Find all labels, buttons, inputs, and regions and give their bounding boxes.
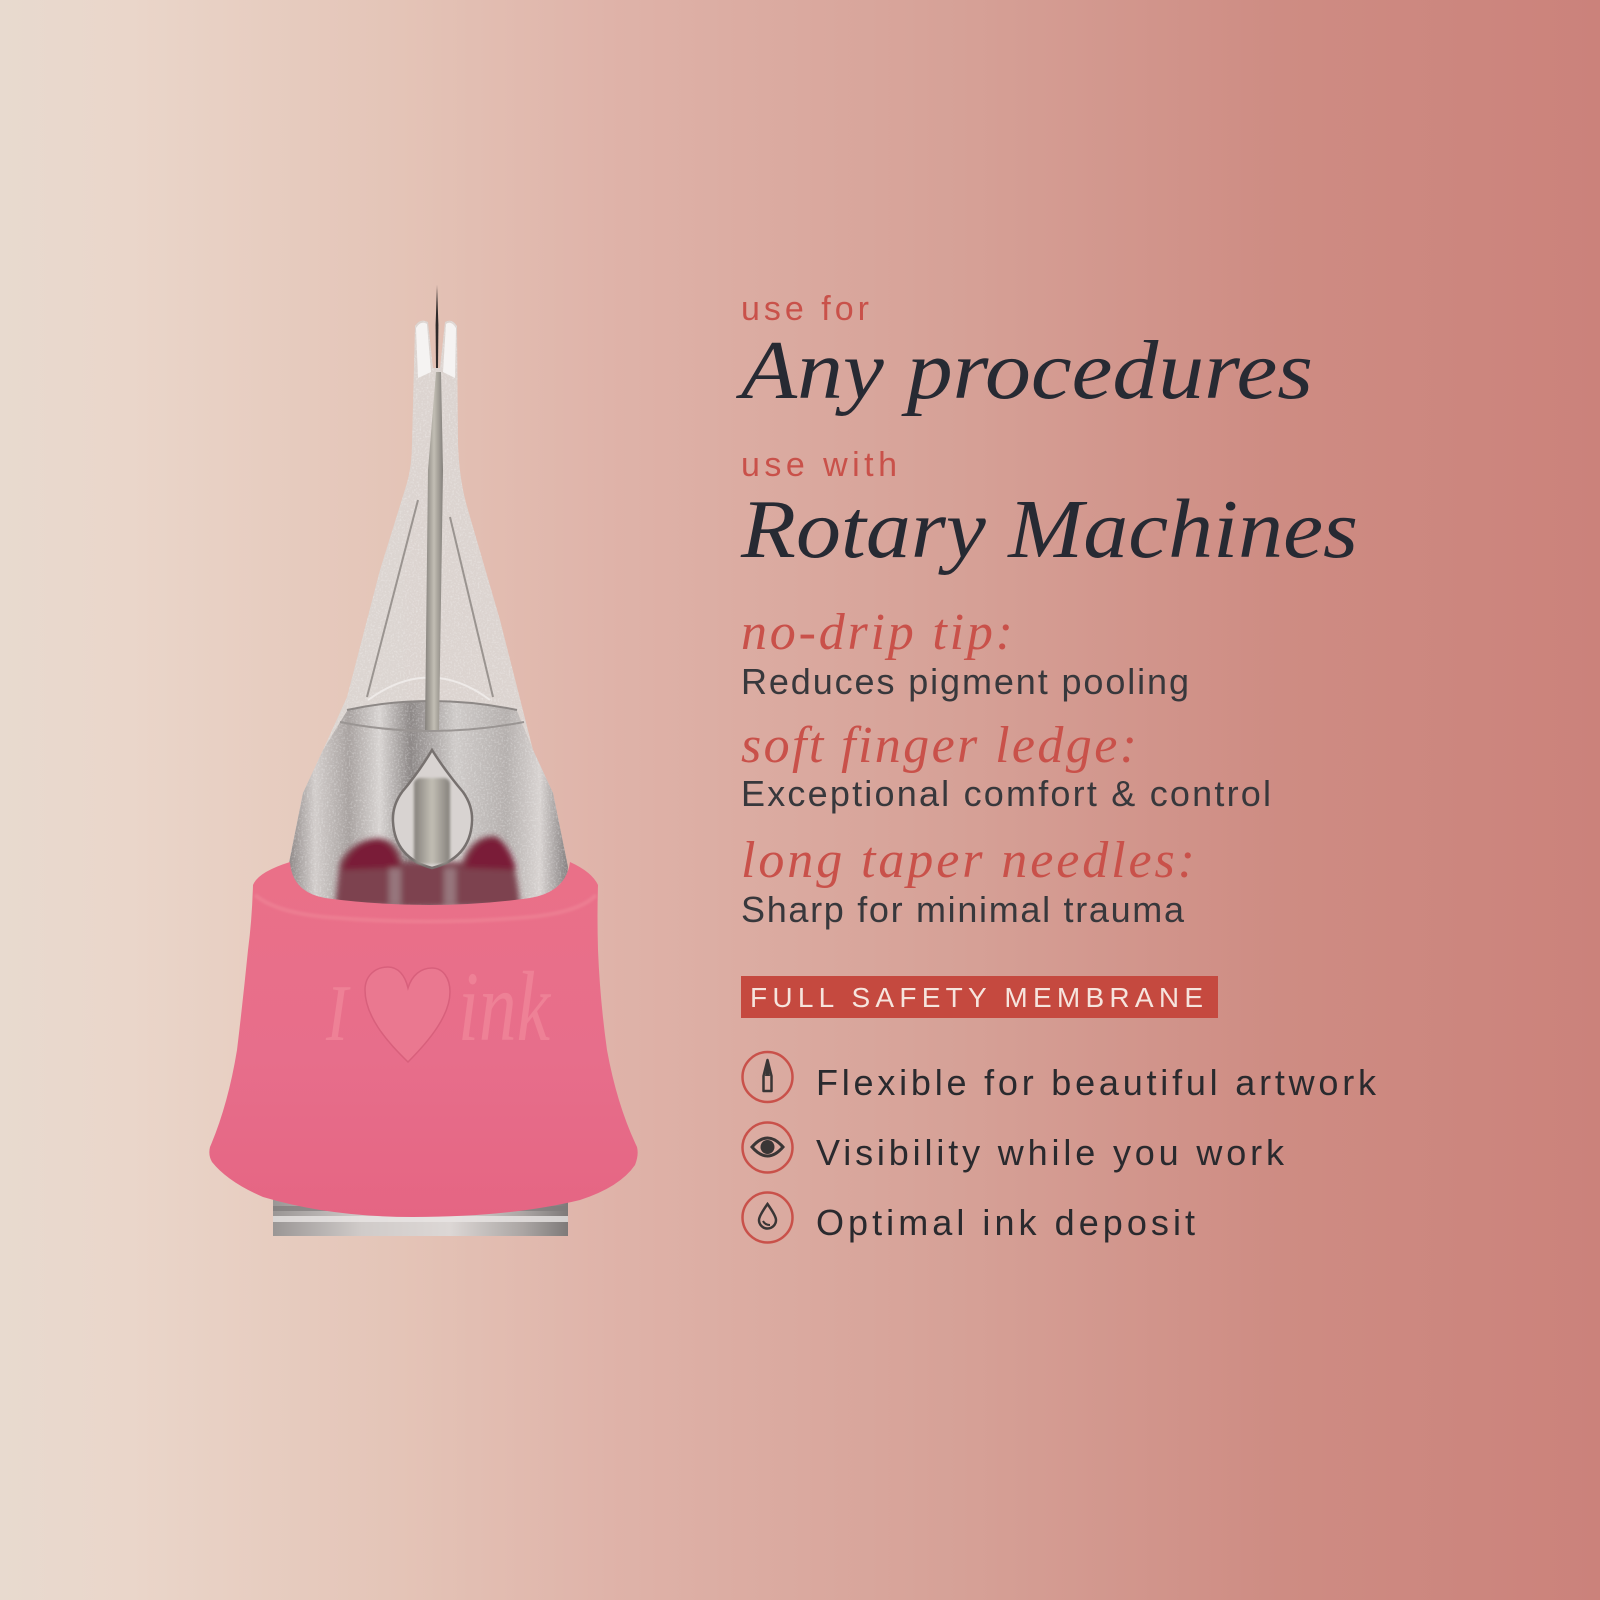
icon: eye bbox=[742, 1122, 792, 1172]
pigment dark red bbox=[335, 836, 520, 907]
needle tip bbox=[436, 285, 438, 368]
embossed logo: I heart ink bbox=[325, 951, 551, 1062]
feature: no-drip tip bbox=[741, 604, 1189, 702]
feature: no-drip tip: Reduces pigment pooling bbox=[741, 661, 1189, 702]
needle shaft bbox=[425, 372, 443, 730]
benefit: visibility: Visibility while you work bbox=[816, 1132, 1285, 1173]
embossed logo: I heart ink: I bbox=[325, 970, 351, 1058]
lower dome ring bbox=[347, 701, 517, 710]
feature: soft finger ledge: soft finger ledge: bbox=[741, 717, 1137, 774]
clear tip body bbox=[285, 320, 570, 910]
feature: no-drip tip: no-drip tip: bbox=[741, 604, 1013, 661]
frosted texture bbox=[285, 320, 570, 910]
fork highlights bbox=[416, 323, 456, 378]
benefit: ink deposit: Optimal ink deposit bbox=[816, 1202, 1195, 1243]
badge: full safety membrane: FULL SAFETY MEMBRANE bbox=[750, 982, 1203, 1013]
feature: long taper needles: long taper needles: bbox=[741, 832, 1195, 889]
feature: soft finger ledge: Exceptional comfort & control bbox=[741, 773, 1271, 814]
embossed logo: I heart ink: ink bbox=[458, 951, 551, 1062]
product: needle cartridge bbox=[209, 285, 638, 1236]
text column bbox=[736, 290, 1377, 1243]
feature: soft finger ledge bbox=[741, 717, 1271, 814]
label: use with: use with bbox=[741, 446, 897, 484]
icon: ink drop bbox=[742, 1192, 792, 1242]
pink grip cap bbox=[209, 862, 638, 1217]
teardrop window bbox=[393, 750, 472, 868]
benefit: flexible: Flexible for beautiful artwork bbox=[816, 1062, 1377, 1103]
heading: Any procedures: Any procedures bbox=[736, 324, 1313, 417]
heading: Rotary Machines: Rotary Machines bbox=[740, 483, 1358, 576]
label: use for: use for bbox=[741, 290, 869, 328]
inner ribs bbox=[367, 500, 493, 697]
benefit: ink deposit bbox=[742, 1192, 1195, 1243]
base tube bbox=[273, 1190, 568, 1236]
icon: needle tip bbox=[742, 1052, 792, 1102]
feature: long taper needles bbox=[741, 832, 1195, 930]
feature: long taper needles: Sharp for minimal trauma bbox=[741, 889, 1185, 930]
